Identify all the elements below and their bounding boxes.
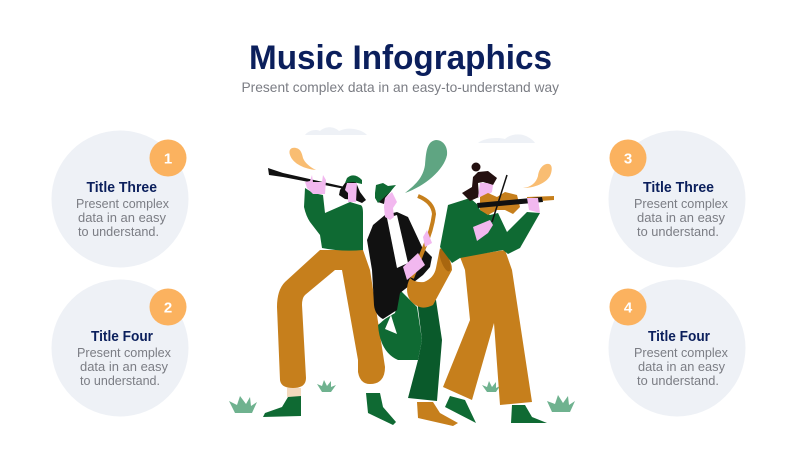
figure: saxophone player — [367, 183, 458, 426]
bun — [472, 162, 480, 172]
back leg — [408, 300, 442, 401]
trousers — [443, 250, 532, 405]
panel: item 4: to understand. — [637, 373, 719, 388]
bow — [492, 175, 507, 222]
panel: item 1 — [52, 130, 188, 268]
panel: item 4: Title Four — [648, 328, 710, 345]
violin neck — [527, 196, 554, 202]
head — [384, 192, 397, 220]
icon: sound wave green — [405, 140, 447, 193]
panel: item 2 — [52, 280, 188, 416]
panel: item 3: 3 — [624, 150, 632, 168]
panel: item 3 — [608, 130, 746, 268]
bell shadow — [437, 247, 453, 273]
orange shoe — [417, 402, 458, 426]
jacket — [367, 212, 432, 319]
panel: item 1: data in an easy — [78, 210, 166, 225]
panel: item 2: 2 — [164, 300, 172, 316]
bent leg trousers — [378, 290, 422, 360]
panel: item 4: 4 — [624, 300, 633, 316]
hat — [345, 175, 362, 184]
hands — [473, 220, 493, 241]
clarinet — [268, 168, 345, 189]
panel: item 4 — [608, 280, 746, 416]
figure: violin player — [440, 162, 554, 423]
hands — [305, 175, 326, 194]
hair — [378, 190, 392, 204]
hair — [462, 171, 497, 201]
icon: grass — [229, 380, 575, 413]
trouser slit — [385, 315, 397, 334]
figure: clarinet player — [263, 168, 396, 425]
panel: item 2: data in an easy — [80, 359, 168, 374]
hat — [375, 183, 396, 203]
saxophone neck — [412, 196, 434, 278]
panel: item 3: Title Three — [643, 179, 714, 196]
panel: item 1: 1 — [164, 150, 172, 168]
face — [478, 183, 493, 197]
sweater — [440, 198, 540, 263]
illustration: musicians — [229, 127, 575, 426]
hands — [403, 253, 425, 280]
ankle — [287, 388, 301, 397]
title: Music Infographics — [249, 39, 552, 77]
panel: item 1: Title Three — [86, 179, 157, 196]
boots — [263, 396, 301, 417]
shirt — [387, 215, 408, 268]
panel: item 4: Present complex — [634, 345, 728, 360]
violin body — [480, 192, 520, 215]
panel: item 3: to understand. — [637, 224, 719, 239]
trousers — [277, 250, 385, 388]
icon: sound wave orange left — [289, 148, 316, 170]
boots — [445, 396, 476, 423]
panel: item 2: Title Four — [91, 328, 153, 345]
panel: item 4: data in an easy — [638, 359, 725, 374]
panel: item 1: to understand. — [78, 224, 159, 239]
subtitle: Present complex data in an easy-to-understand way — [242, 79, 559, 95]
sweater — [304, 188, 363, 251]
icon: clouds — [305, 127, 535, 143]
panel: item 3: data in an easy — [637, 210, 725, 225]
panel: item 1: Present complex — [76, 196, 169, 211]
saxophone bell — [407, 248, 452, 308]
panel: item 2: Present complex — [77, 345, 171, 360]
hair — [339, 180, 366, 203]
panel: item 2: to understand. — [80, 373, 160, 388]
face — [345, 183, 357, 202]
panel: item 3: Present complex — [634, 196, 728, 211]
icon: sound wave orange right — [523, 164, 552, 188]
